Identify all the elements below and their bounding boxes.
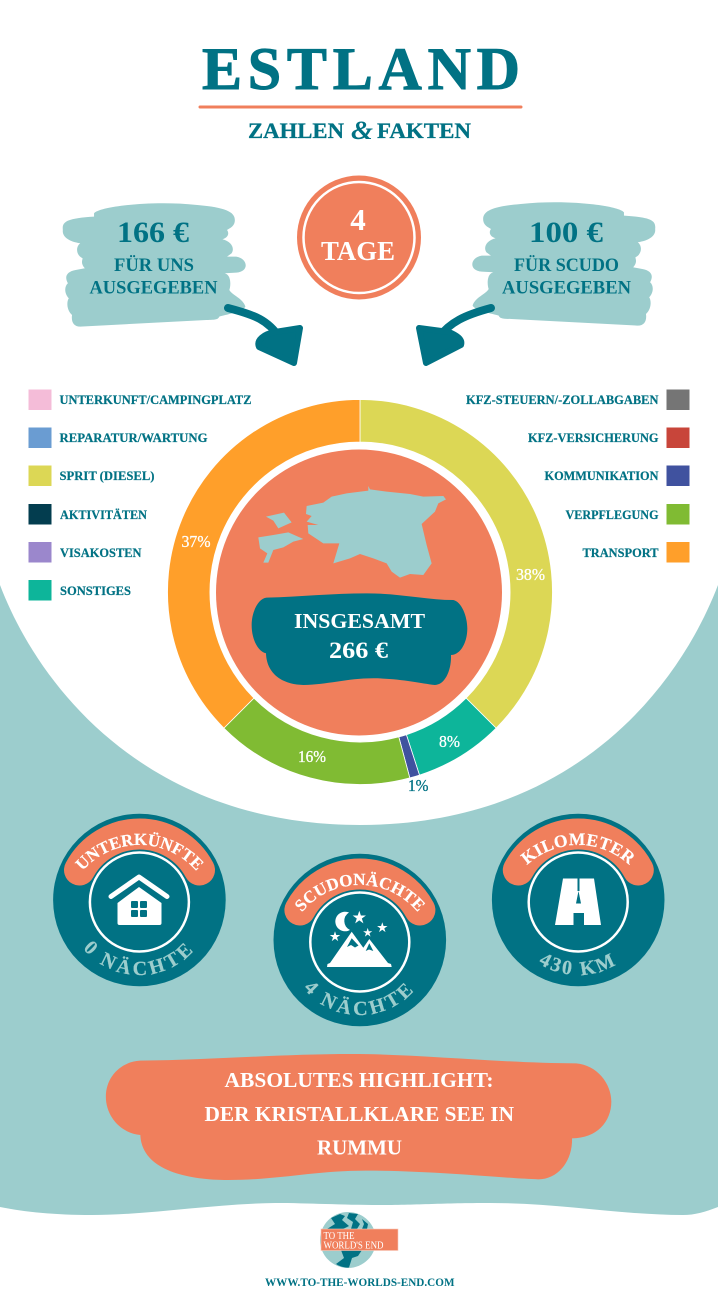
icon: map of Estonia: [258, 486, 446, 578]
title: &: [351, 116, 373, 145]
callout: absolutes highlight: [106, 1054, 611, 1180]
badge: Kilometer: [492, 814, 664, 986]
legend: right: KFZ-VERSICHERUNG: [528, 430, 658, 445]
callout: absolutes highlight: ABSOLUTES HIGHLIGHT:: [224, 1068, 494, 1092]
badge: Unterkünfte: 0 NÄCHTE: [84, 942, 193, 976]
legend: left: UNTERKUNFT/CAMPINGPLATZ: [60, 392, 252, 407]
icon: mountains with moon and stars: [327, 911, 392, 967]
legend: right: VERPFLEGUNG: [566, 507, 658, 522]
title: FAKTEN: [377, 118, 471, 143]
callout: absolutes highlight: RUMMU: [317, 1136, 402, 1160]
icon: house: [111, 877, 167, 925]
percentage labels: 1%: [408, 776, 428, 795]
arrow: right: [419, 308, 491, 363]
panel: für uns ausgegeben: FÜR UNS: [114, 255, 194, 276]
badge: Scudonächte: 4 NÄCHTE: [305, 982, 414, 1016]
panel: für uns ausgegeben: AUSGEGEBEN: [90, 278, 218, 298]
badge: 4 Tage: [297, 176, 421, 300]
callout: insgesamt: 266 €: [329, 638, 389, 663]
title: ESTLAND: [202, 36, 520, 102]
panel: für scudo ausgegeben: [472, 202, 655, 326]
badge: Scudonächte: [274, 854, 446, 1026]
badge: Unterkünfte: [53, 814, 226, 986]
legend: right: [466, 390, 690, 562]
percentage labels: 38%: [516, 565, 545, 584]
percentage labels: 37%: [182, 532, 210, 551]
badge: Scudonächte: SCUDONÄCHTE: [295, 872, 426, 912]
logo: globe with banner: [320, 1212, 398, 1268]
legend: left: VISAKOSTEN: [60, 545, 142, 560]
percentage labels: 8%: [439, 732, 460, 751]
donut chart: [168, 400, 552, 784]
legend: left: SPRIT (DIESEL): [60, 468, 154, 483]
legend: right: KOMMUNIKATION: [544, 468, 659, 483]
badge: Kilometer: 430 KM: [540, 953, 616, 976]
panel: für scudo ausgegeben: FÜR SCUDO: [514, 255, 619, 276]
arrow: left: [228, 308, 300, 363]
legend: right: KFZ-STEUERN/-ZOLLABGABEN: [466, 392, 659, 407]
legend: left: REPARATUR/WARTUNG: [60, 430, 208, 445]
panel: für scudo ausgegeben: 100 €: [529, 216, 603, 249]
centre circle: [216, 450, 502, 736]
panel: für scudo ausgegeben: AUSGEGEBEN: [502, 278, 631, 298]
percentage labels: [182, 532, 545, 795]
legend: right: TRANSPORT: [582, 545, 659, 560]
badge: 4 Tage: 4: [350, 202, 366, 237]
logo: globe with banner: WORLD'S END: [324, 1240, 384, 1251]
panel: für uns ausgegeben: 166 €: [117, 216, 189, 249]
badge: Kilometer: KILOMETER: [520, 833, 634, 865]
callout: insgesamt: [252, 593, 467, 685]
website url: WWW.TO-THE-WORLDS-END.COM: [265, 1277, 455, 1289]
legend: left: AKTIVITÄTEN: [60, 507, 148, 522]
badge: 4 Tage: TAGE: [321, 236, 395, 266]
badge: Unterkünfte: UNTERKÜNFTE: [74, 832, 204, 871]
title: ZAHLEN: [248, 118, 344, 143]
legend: left: SONSTIGES: [60, 583, 131, 598]
panel: für uns ausgegeben: [63, 203, 246, 327]
legend: left: [28, 390, 252, 600]
title: [200, 36, 521, 145]
background: teal wave area: [0, 585, 718, 1215]
callout: insgesamt: INSGESAMT: [294, 609, 425, 633]
logo: globe with banner: TO THE: [324, 1231, 354, 1242]
icon: road: [555, 878, 601, 926]
callout: absolutes highlight: DER KRISTALLKLARE SEE IN: [204, 1102, 514, 1126]
percentage labels: 16%: [298, 747, 326, 766]
